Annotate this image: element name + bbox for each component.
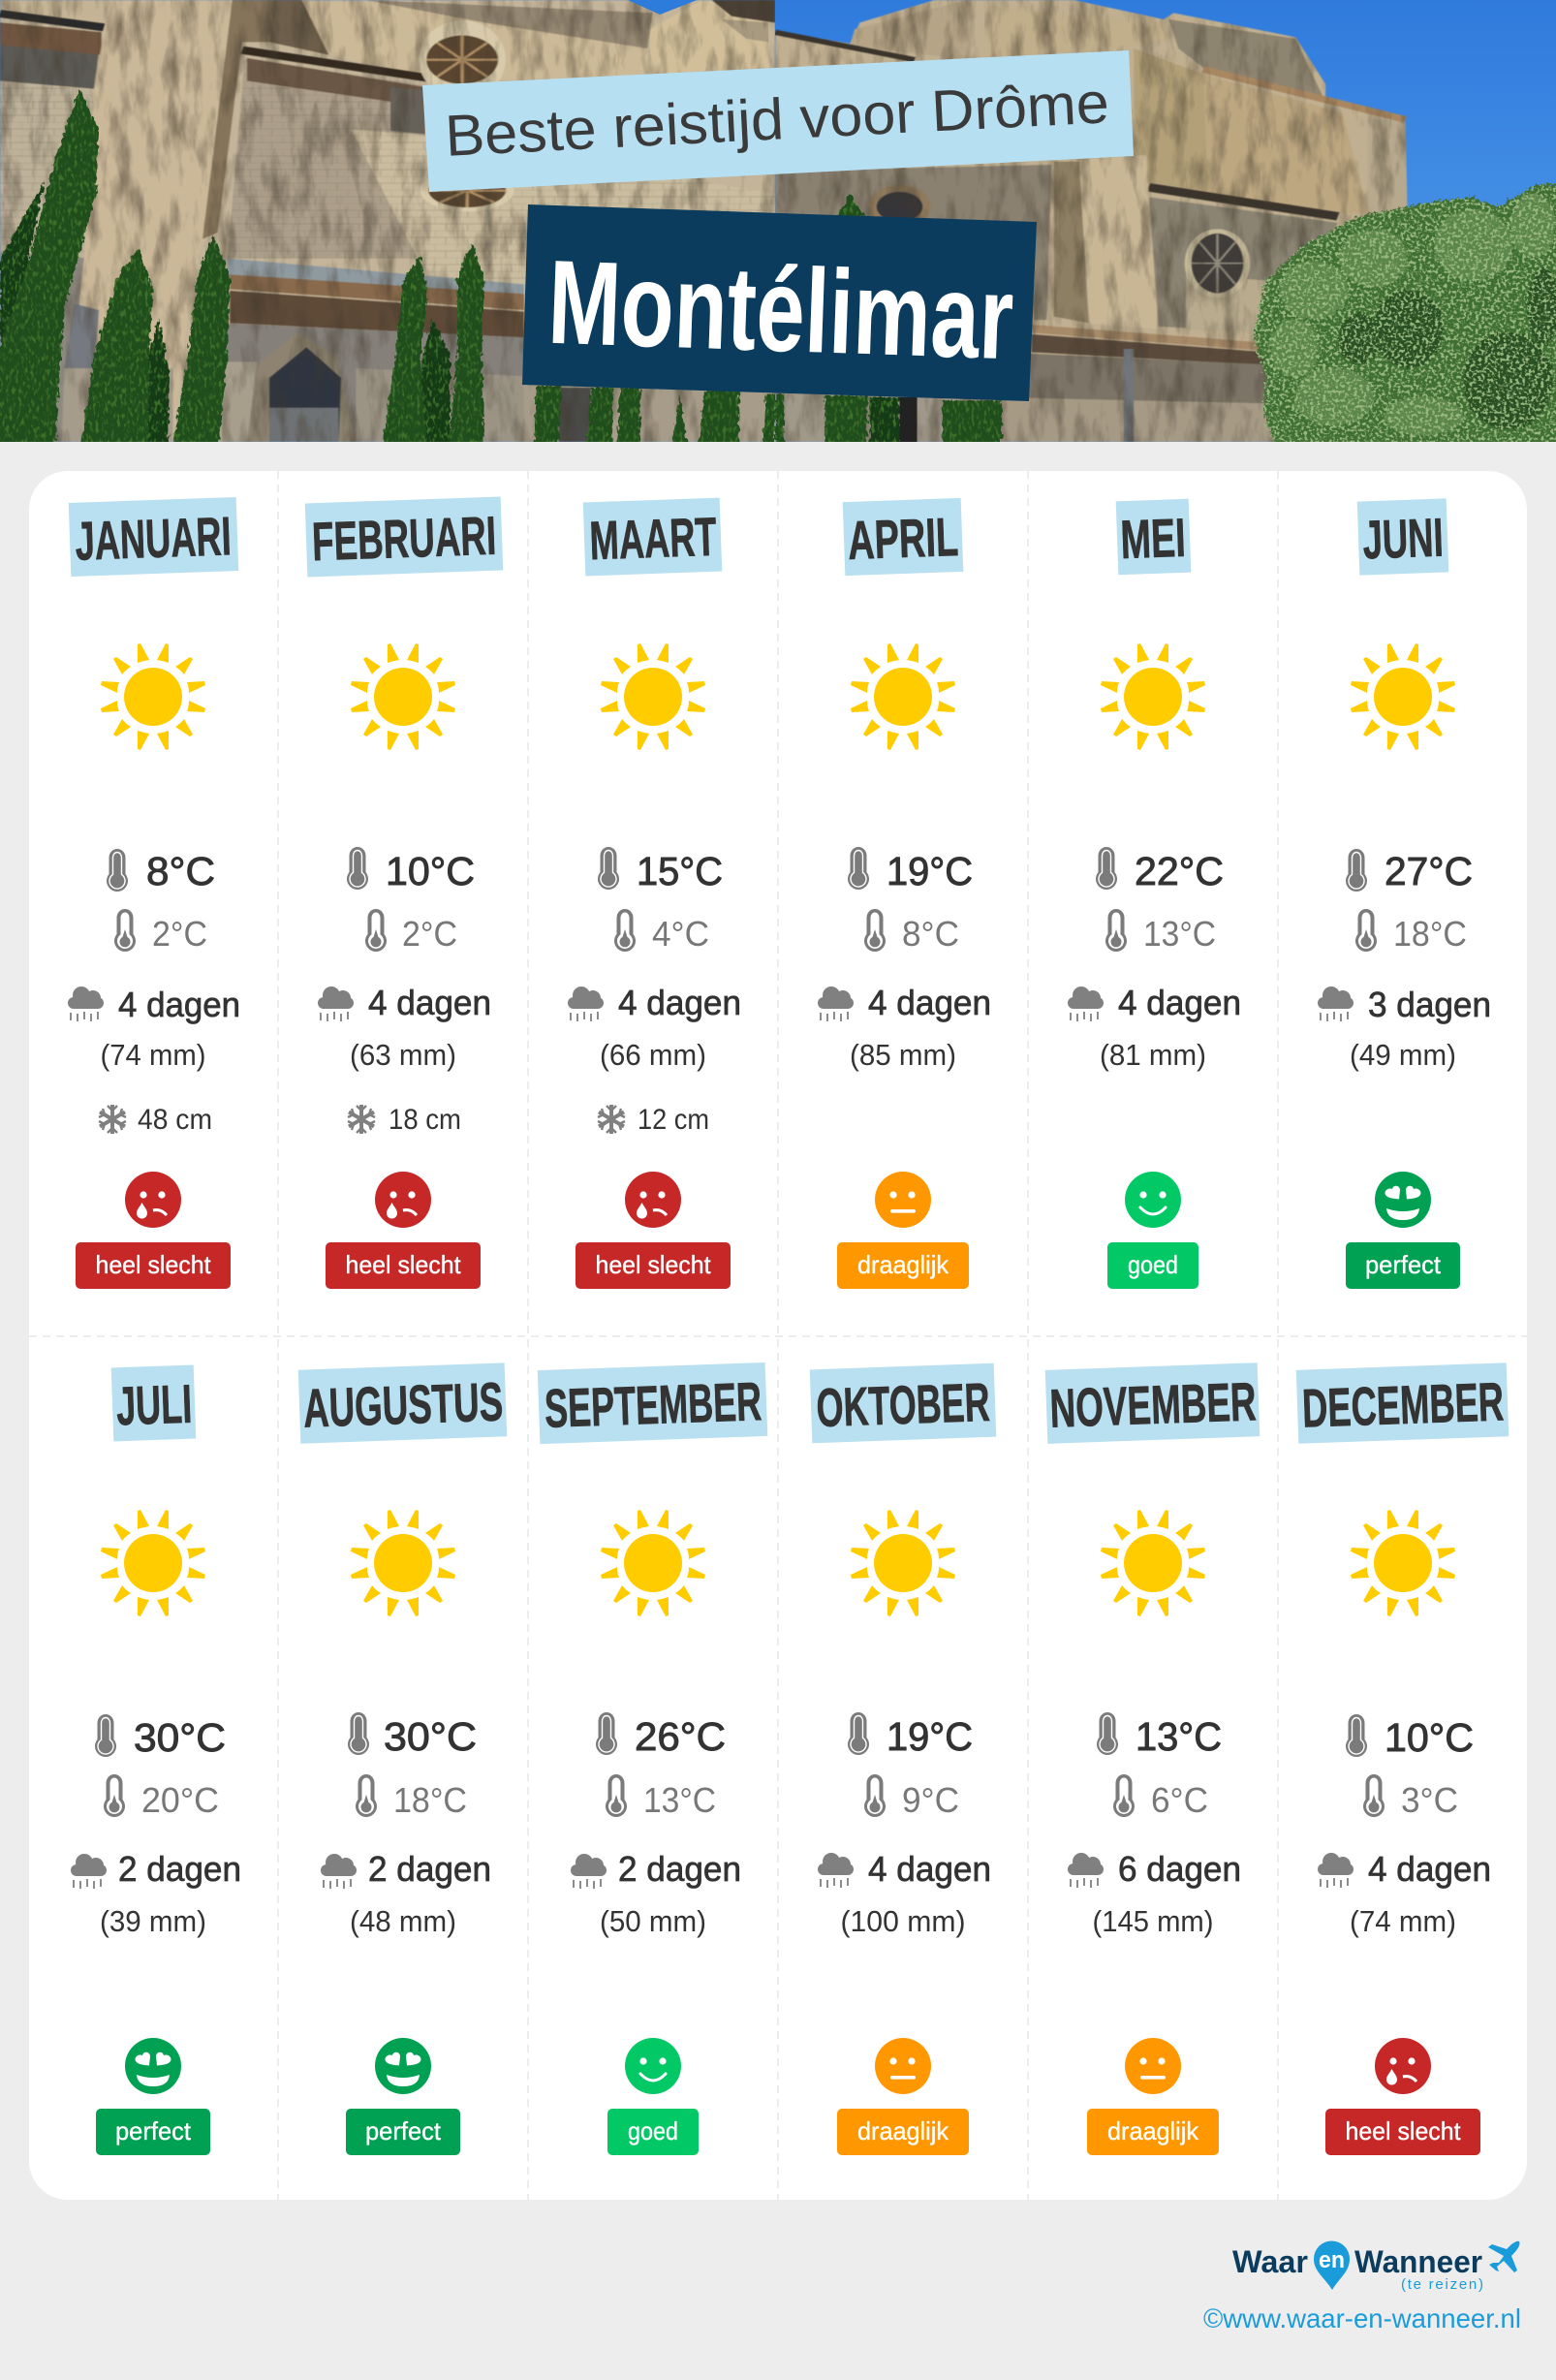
icon: sun (101, 643, 205, 750)
rating badge (1087, 2109, 1219, 2155)
month: december (1296, 1362, 1509, 2155)
rating face (875, 1172, 931, 1228)
rating face (875, 2038, 931, 2094)
max temperature: 27°C (1385, 849, 1473, 893)
rating badge (326, 1242, 481, 1289)
max temperature: 15°C (637, 849, 723, 893)
rating badge: heel slecht (595, 1250, 711, 1279)
rain days (818, 1849, 991, 1889)
rating badge (837, 2109, 969, 2155)
rain days (318, 983, 491, 1022)
max temperature (848, 1712, 973, 1759)
month label: SEPTEMBER (544, 1370, 762, 1439)
icon: airplane (1488, 2241, 1519, 2272)
rating badge: heel slecht (345, 1250, 461, 1279)
min temperature (614, 909, 709, 954)
max temperature: 26°C (635, 1714, 726, 1759)
rating badge (576, 1242, 731, 1289)
month label: JULI (115, 1373, 193, 1436)
icon: sun (351, 1510, 455, 1616)
rating face (125, 1172, 181, 1228)
snowfall: 48 cm (138, 1104, 212, 1136)
min temperature: 18°C (393, 1780, 467, 1820)
icon: sun (1351, 643, 1455, 750)
month label: FEBRUARI (311, 505, 497, 572)
rating face (375, 1172, 431, 1228)
month: februari (305, 496, 503, 1289)
rating badge: perfect (365, 2116, 442, 2145)
max temperature (95, 1714, 226, 1760)
snowfall: 12 cm (638, 1104, 709, 1136)
max temperature (1096, 847, 1224, 893)
max temperature: 10°C (1385, 1715, 1474, 1760)
max temperature (848, 847, 973, 893)
rating badge (1107, 1242, 1198, 1289)
rating badge (1346, 1242, 1460, 1289)
rating badge (96, 2109, 210, 2155)
snowfall (348, 1104, 461, 1136)
min temperature (864, 1774, 959, 1820)
month: april (818, 498, 991, 1289)
rainfall: (100 mm) (841, 1904, 965, 1938)
snowfall: 18 cm (389, 1104, 461, 1136)
rating badge (346, 2109, 460, 2155)
month label (1045, 1362, 1260, 1444)
rain days: 4 dagen (868, 1849, 991, 1889)
rain days (818, 983, 991, 1022)
max temperature (107, 849, 215, 893)
min temperature (114, 909, 207, 954)
subtitle banner: Beste reistijd voor Drôme (444, 70, 1110, 169)
rain days: 6 dagen (1118, 1849, 1241, 1889)
rating badge (76, 1242, 231, 1289)
month label (1357, 498, 1448, 576)
rating face (375, 2038, 431, 2094)
month: juni (1318, 498, 1491, 1289)
rating badge: draaglijk (857, 1250, 949, 1279)
month label: OKTOBER (816, 1371, 991, 1438)
rainfall: (81 mm) (1100, 1038, 1206, 1072)
logo: Waar en Wanneer: Wanneer (1354, 2244, 1482, 2279)
max temperature (598, 847, 723, 893)
max temperature (1346, 849, 1473, 893)
month label: AUGUSTUS (302, 1370, 504, 1439)
rainfall: (66 mm) (600, 1038, 706, 1072)
month label: APRIL (847, 506, 959, 571)
rainfall: (48 mm) (350, 1904, 456, 1938)
rating badge: perfect (1365, 1250, 1442, 1279)
rating badge: heel slecht (1345, 2116, 1461, 2145)
min temperature: 2°C (402, 914, 457, 954)
rain days: 4 dagen (368, 983, 491, 1022)
rating face (125, 2038, 181, 2094)
rating face (1125, 2038, 1181, 2094)
rating badge: draaglijk (857, 2116, 949, 2145)
icon: sun (351, 643, 455, 750)
min temperature: 4°C (652, 914, 709, 954)
rain days: 2 dagen (118, 1849, 241, 1889)
rating badge: goed (1128, 1250, 1178, 1279)
month label (298, 1362, 507, 1444)
month label: JANUARI (75, 505, 233, 572)
max temperature: 19°C (887, 849, 973, 893)
rainfall: (49 mm) (1350, 1038, 1456, 1072)
rain days: 3 dagen (1368, 985, 1491, 1024)
panel: monthly climate card (29, 471, 1527, 2200)
min temperature (365, 909, 457, 954)
icon: sun (1351, 1510, 1455, 1616)
icon: map pin (1314, 2240, 1350, 2290)
min temperature (1355, 909, 1467, 954)
rain days: 4 dagen (118, 985, 240, 1024)
icon: sun (601, 643, 705, 750)
min temperature: 13°C (643, 1780, 716, 1820)
month label (305, 496, 503, 577)
month label (1116, 499, 1191, 575)
min temperature (606, 1774, 716, 1820)
max temperature: 10°C (386, 849, 475, 893)
min temperature: 3°C (1401, 1780, 1458, 1820)
min temperature (1105, 909, 1216, 954)
rainfall: (39 mm) (100, 1904, 206, 1938)
title banner: Montélimar (522, 204, 1037, 401)
max temperature (596, 1712, 726, 1759)
icon: sun (1101, 643, 1205, 750)
min temperature: 20°C (141, 1780, 219, 1820)
rain days: 4 dagen (868, 983, 991, 1022)
rain days: 2 dagen (618, 1849, 741, 1889)
month label (583, 498, 722, 576)
max temperature: 30°C (134, 1715, 226, 1760)
rain days: 2 dagen (368, 1849, 491, 1889)
month: november (1045, 1362, 1260, 2155)
logo: Waar en Wanneer: en (1319, 2247, 1345, 2273)
min temperature: 13°C (1143, 914, 1216, 954)
max temperature: 13°C (1136, 1714, 1222, 1759)
rating badge: heel slecht (95, 1250, 211, 1279)
month: juli (71, 1365, 241, 2155)
snowfall (99, 1104, 212, 1136)
month label: NOVEMBER (1049, 1370, 1258, 1439)
copyright url: ©www.waar-en-wanneer.nl (1203, 2303, 1521, 2333)
month label (538, 1362, 767, 1444)
month: augustus (298, 1362, 507, 2155)
max temperature: 8°C (146, 849, 215, 893)
logo: Waar en Wanneer: Waar (1232, 2244, 1308, 2279)
month label (111, 1365, 196, 1441)
rating face (625, 2038, 681, 2094)
rainfall: (63 mm) (350, 1038, 456, 1072)
min temperature: 9°C (902, 1780, 959, 1820)
min temperature (1113, 1774, 1208, 1820)
month label (810, 1363, 996, 1443)
logo: Waar en Wanneer: (te reizen) (1401, 2276, 1483, 2293)
max temperature: 22°C (1135, 849, 1224, 893)
rating badge: perfect (115, 2116, 192, 2145)
month label: MEI (1119, 507, 1187, 570)
min temperature (864, 909, 959, 954)
min temperature (1363, 1774, 1458, 1820)
rainfall: (50 mm) (600, 1904, 706, 1938)
logo: Waar en Wanneer (1232, 2240, 1519, 2293)
month label (69, 497, 238, 577)
month: september (538, 1362, 767, 2155)
min temperature: 2°C (152, 914, 207, 954)
icon: sun (851, 643, 955, 750)
header photo: church in Montélimar (0, 0, 1556, 465)
rain days: 4 dagen (1368, 1849, 1491, 1889)
month label: MAART (588, 506, 718, 571)
subtitle banner (422, 50, 1134, 192)
rain days (1068, 983, 1241, 1022)
max temperature (1097, 1712, 1222, 1759)
min temperature (356, 1774, 467, 1820)
snowfall (598, 1104, 709, 1136)
min temperature (104, 1774, 219, 1820)
month: mei (1068, 499, 1241, 1289)
rating badge (837, 1242, 969, 1289)
max temperature: 19°C (887, 1714, 973, 1759)
rain days (68, 985, 240, 1024)
rating face (1375, 2038, 1431, 2094)
rating face (1375, 1172, 1431, 1228)
rating badge (607, 2109, 699, 2155)
rainfall: (74 mm) (101, 1038, 205, 1072)
rating badge (1325, 2109, 1480, 2155)
min temperature: 8°C (902, 914, 959, 954)
month label: JUNI (1361, 507, 1445, 570)
min temperature: 18°C (1393, 914, 1467, 954)
rainfall: (74 mm) (1350, 1904, 1456, 1938)
title banner: Montélimar: Montélimar (546, 236, 1015, 385)
month label (843, 498, 963, 576)
icon: sun (1101, 1510, 1205, 1616)
max temperature: 30°C (384, 1714, 477, 1759)
icon: sun (851, 1510, 955, 1616)
rain days (568, 983, 741, 1022)
icon: sun (101, 1510, 205, 1616)
rain days (1318, 1849, 1491, 1889)
rain days (1068, 1849, 1241, 1889)
rainfall: (85 mm) (850, 1038, 956, 1072)
rating face (625, 1172, 681, 1228)
month: januari (68, 497, 240, 1289)
rating face (1125, 1172, 1181, 1228)
rain days: 4 dagen (1118, 983, 1241, 1022)
max temperature (1346, 1714, 1474, 1760)
rating badge: draaglijk (1107, 2116, 1199, 2145)
month: maart (568, 498, 741, 1289)
rating badge: goed (628, 2116, 678, 2145)
icon: sun (601, 1510, 705, 1616)
max temperature (347, 847, 475, 893)
rain days: 4 dagen (618, 983, 741, 1022)
rainfall: (145 mm) (1093, 1904, 1213, 1938)
max temperature (348, 1712, 477, 1759)
rain days (1318, 985, 1491, 1024)
min temperature: 6°C (1151, 1780, 1208, 1820)
month: oktober (810, 1363, 996, 2155)
